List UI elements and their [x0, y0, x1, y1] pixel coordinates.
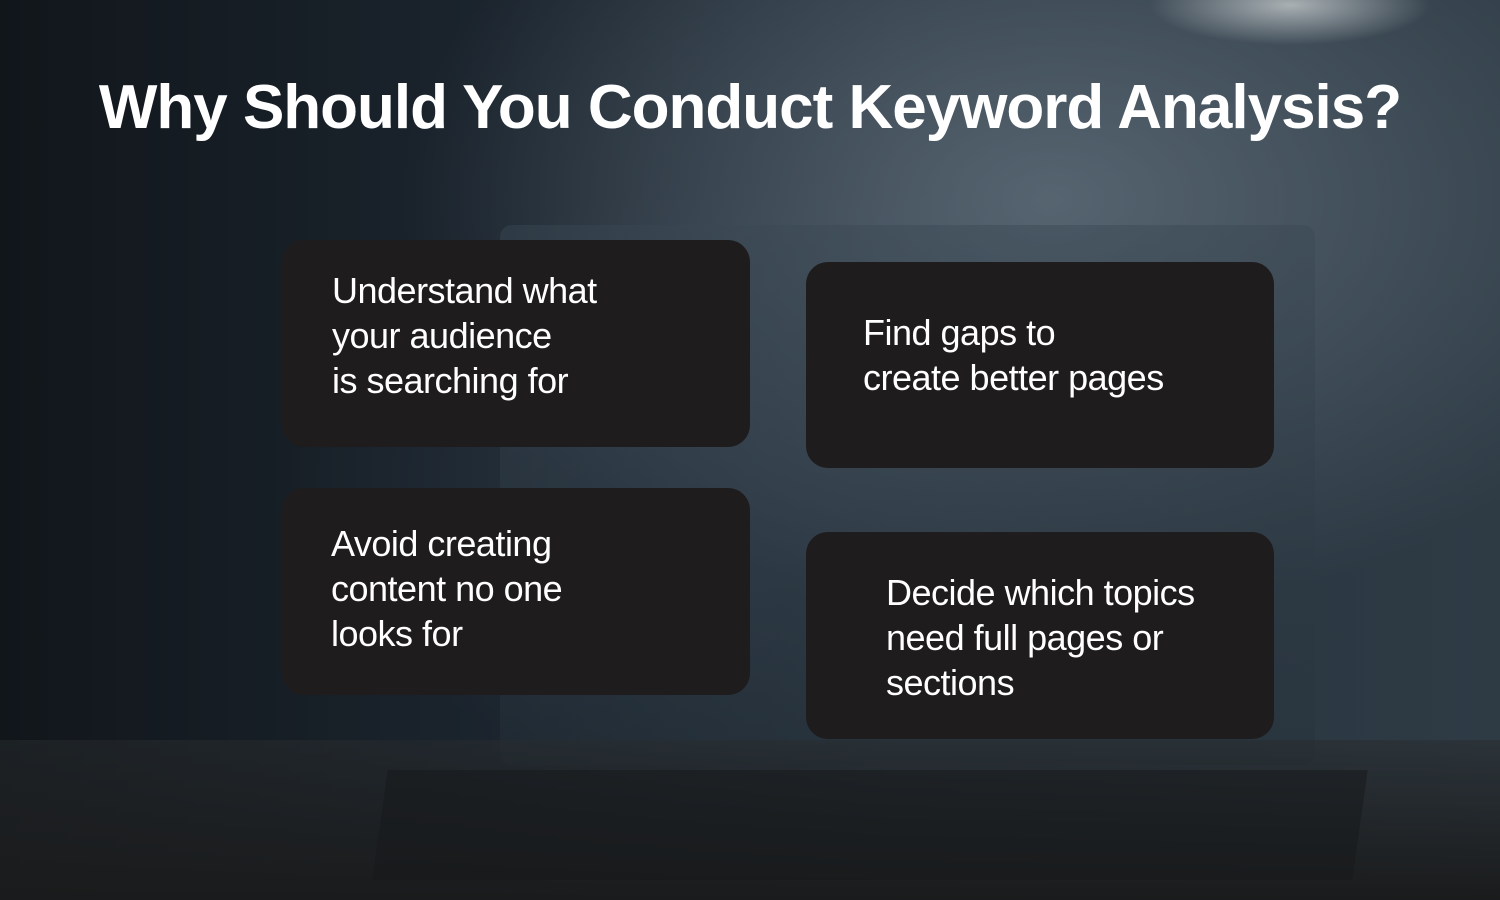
- card: decide topics: sections: [886, 662, 1014, 703]
- card: understand audience: [282, 240, 750, 447]
- card: avoid content: content no one: [331, 568, 562, 609]
- card: avoid content: [282, 488, 750, 695]
- card: find gaps: create better pages: [863, 357, 1164, 398]
- card: find gaps: [806, 262, 1274, 468]
- card: understand audience: Understand what: [332, 270, 597, 311]
- card: decide topics: [806, 532, 1274, 739]
- card: decide topics: need full pages or: [886, 617, 1163, 658]
- title: Why Should You Conduct Keyword Analysis?: [99, 73, 1401, 142]
- card: understand audience: your audience: [332, 315, 552, 356]
- card: understand audience: is searching for: [332, 360, 568, 401]
- card: avoid content: looks for: [331, 613, 463, 654]
- card: decide topics: Decide which topics: [886, 572, 1195, 613]
- card: avoid content: Avoid creating: [331, 523, 551, 564]
- card: find gaps: Find gaps to: [863, 312, 1055, 353]
